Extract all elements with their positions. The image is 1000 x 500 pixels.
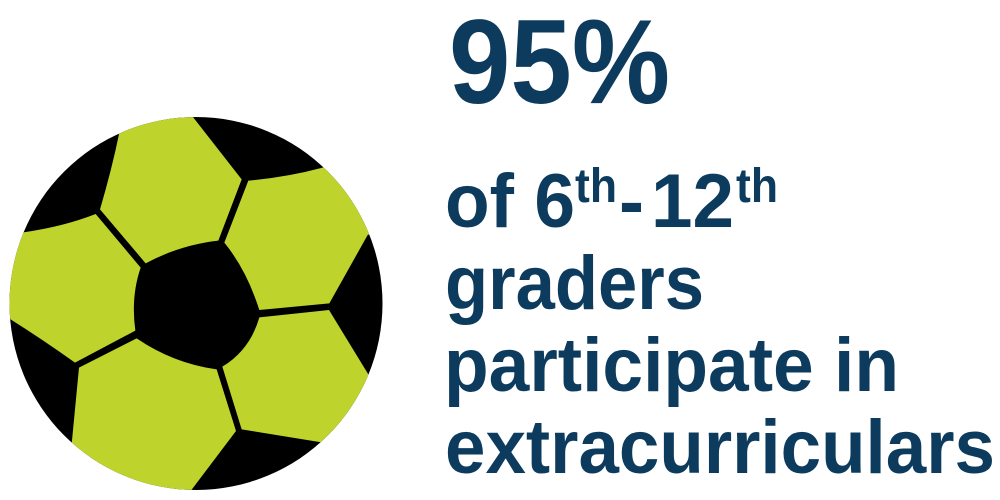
line: of 6th-12th: 12 — [651, 159, 734, 244]
line: participate in: participate in — [444, 323, 899, 408]
line: of 6th-12th: of 6 — [445, 159, 575, 244]
caption text — [444, 159, 995, 490]
line: graders: graders — [445, 241, 704, 326]
icon: soccer ball — [10, 117, 382, 490]
line: of 6th-12th: - — [619, 159, 644, 244]
line: of 6th-12th — [445, 159, 778, 244]
line: of 6th-12th: th — [575, 160, 617, 213]
line: of 6th-12th: th — [736, 160, 778, 213]
